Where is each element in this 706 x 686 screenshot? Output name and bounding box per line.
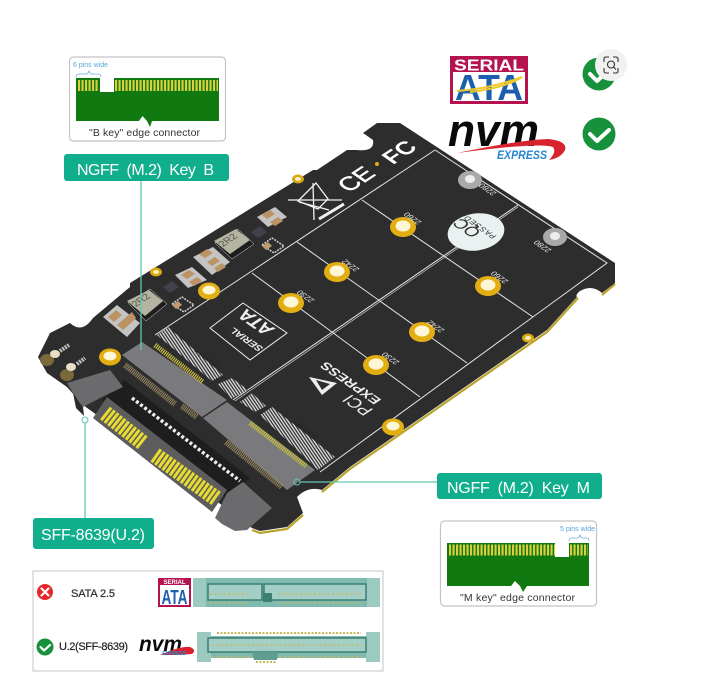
size labels: 2260 bbox=[401, 210, 424, 226]
silk: M.2 B key hatch bbox=[157, 327, 248, 399]
sticker: QC passed: QC bbox=[449, 215, 485, 240]
icon: red cross bbox=[37, 584, 53, 600]
component: inductor 2R2 upper bbox=[214, 229, 254, 259]
connector: M.2 slot M bbox=[203, 402, 315, 490]
green edge connector bbox=[76, 78, 219, 127]
logo: small NVM Express: nvm bbox=[139, 633, 182, 656]
size labels: 2230 bbox=[379, 350, 402, 366]
adapter board bbox=[38, 123, 615, 533]
silk: Serial ATA marking: SERIAL bbox=[227, 325, 266, 352]
gold board edge bbox=[252, 284, 615, 533]
connector: SFF-8639 U.2 bbox=[67, 370, 272, 531]
leader line: key M bbox=[294, 479, 437, 485]
size labels: 2242 bbox=[339, 257, 362, 273]
component: inductor 2R2 lower: 2R2 bbox=[129, 292, 154, 309]
label: NGFF key B: NGFF (M.2) Key B bbox=[77, 162, 214, 179]
silk: PCI Express marking bbox=[309, 359, 384, 418]
logo: Serial ATA: ATA bbox=[455, 67, 523, 108]
pin width note: 6 pins wide bbox=[73, 62, 108, 69]
logo: small Serial ATA: SERIAL bbox=[163, 580, 186, 586]
connector diagram: U.2 bbox=[197, 632, 380, 662]
icon: green check bbox=[36, 638, 54, 656]
logo: Serial ATA bbox=[450, 56, 528, 108]
silk: M.2 B key hatch: M.2 B KEY bbox=[193, 348, 221, 367]
caption: "M key" edge connector bbox=[460, 592, 576, 604]
left latch block bbox=[67, 370, 123, 407]
panel: B key edge connector bbox=[70, 57, 226, 141]
panel: M key edge connector bbox=[440, 521, 596, 606]
silk: PCI Express marking: PCI bbox=[338, 392, 377, 418]
silk: Serial ATA marking bbox=[210, 303, 287, 360]
size labels: 2242 bbox=[424, 318, 447, 334]
logo: NVM Express: EXPRESS bbox=[497, 150, 547, 162]
icon: image search button bbox=[595, 49, 627, 81]
mounting holes bbox=[99, 162, 567, 436]
size labels: 2280 bbox=[531, 238, 554, 254]
pin width note: 5 pins wide bbox=[560, 526, 595, 533]
marks: CE and FC bbox=[332, 136, 423, 196]
sticker: QC passed bbox=[445, 210, 507, 254]
icon: check SATA bbox=[582, 58, 616, 90]
mark: weee bin bbox=[288, 183, 344, 220]
pcb body bbox=[38, 123, 615, 531]
sticker: QC passed: PASSED bbox=[461, 214, 499, 240]
SATA label: SATA 2.5 bbox=[71, 588, 115, 600]
right latch block bbox=[215, 482, 272, 531]
silk: M.2 M key hatch bbox=[240, 393, 335, 470]
gold finger contacts bbox=[105, 413, 143, 443]
marks: CE and FC: FC bbox=[376, 136, 423, 168]
silkscreen grid lines bbox=[155, 150, 607, 472]
connector diagram: SATA bbox=[193, 578, 380, 607]
logo: small Serial ATA bbox=[158, 578, 191, 609]
logo: small NVM Express: EXPRESS bbox=[162, 651, 186, 657]
size labels: 2230 bbox=[294, 288, 317, 304]
green edge connector bbox=[447, 543, 589, 592]
leader line: SFF-8639 bbox=[82, 417, 88, 518]
label: NGFF key M: NGFF (M.2) Key M bbox=[447, 480, 590, 497]
grey tongue bbox=[93, 397, 227, 512]
U.2 label: U.2(SFF-8639) bbox=[59, 641, 128, 653]
logo: Serial ATA: SERIAL bbox=[454, 58, 524, 74]
caption: "B key" edge connector bbox=[89, 127, 200, 139]
logo: NVM Express: nvm bbox=[448, 105, 539, 156]
socket floor with contacts bbox=[102, 380, 250, 497]
leader line: key B bbox=[140, 181, 142, 350]
size labels bbox=[294, 181, 554, 366]
component: inductor 2R2 upper: 2R2 bbox=[216, 232, 241, 249]
LEDs and pads bbox=[40, 345, 85, 381]
panel: interface comparison bbox=[33, 571, 383, 671]
size labels: 2280 bbox=[476, 181, 499, 197]
size labels: 2260 bbox=[488, 269, 511, 285]
marks: CE and FC: CE bbox=[332, 163, 382, 196]
connector: M.2 slot B bbox=[122, 342, 227, 417]
component: capacitors bbox=[103, 207, 287, 337]
logo: small Serial ATA: ATA bbox=[162, 587, 188, 609]
label: NGFF key B bbox=[64, 154, 229, 181]
silk: PCI Express marking: EXPRESS bbox=[316, 359, 384, 407]
label: SFF-8639 bbox=[33, 518, 154, 549]
component: inductor 2R2 lower bbox=[127, 289, 167, 321]
component: ICs and small parts bbox=[163, 226, 284, 312]
icon: check NVMe bbox=[582, 118, 616, 150]
silk: M.2 M key hatch: M.2 M KEY bbox=[292, 419, 320, 438]
label: SFF-8639: SFF-8639(U.2) bbox=[41, 527, 145, 544]
silk: Serial ATA marking: ATA bbox=[233, 305, 280, 338]
label: NGFF key M bbox=[437, 473, 602, 499]
